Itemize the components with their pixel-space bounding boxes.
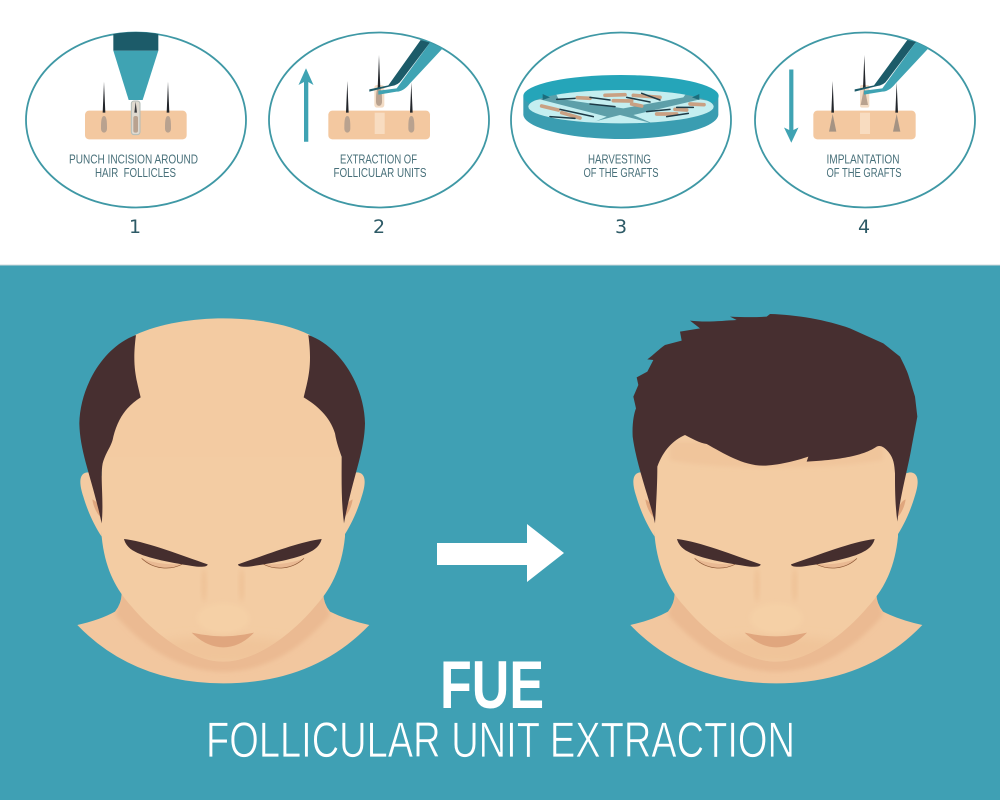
neck and shoulders [77, 590, 369, 683]
illustration: balding head before [77, 318, 369, 683]
illustration: tweezers extracting a follicle [328, 40, 443, 139]
panel: step 4 implantation [755, 32, 975, 238]
remaining side hair [79, 335, 365, 523]
eyebrows [677, 539, 875, 567]
eyelids [695, 558, 857, 568]
caption: step 3: OF THE GRAFTS [584, 166, 658, 180]
caption: step 4: OF THE GRAFTS [826, 166, 902, 180]
illustration: petri dish with grafts [520, 75, 723, 139]
mouth [192, 633, 254, 647]
panel: step 1 punch incision [26, 32, 246, 238]
caption: step 1: HAIR FOLLICLES [95, 166, 176, 180]
bald scalp [102, 318, 345, 470]
eyebrows [124, 539, 322, 567]
arrow: before to after [437, 524, 564, 582]
step number 2: 2 [373, 216, 385, 238]
caption: step 1: PUNCH INCISION AROUND [69, 152, 198, 166]
caption: step 4: IMPLANTATION [826, 152, 900, 166]
neck and shoulders [630, 590, 922, 683]
caption: step 3: HARVESTING [588, 152, 651, 166]
full head of hair [633, 314, 917, 523]
step number 1: 1 [129, 216, 141, 238]
ears [80, 472, 365, 537]
caption: step 3 [584, 152, 658, 180]
mouth [745, 633, 807, 647]
illustration: punch tool and skin [85, 32, 187, 139]
illustration: head with restored hair after [630, 314, 922, 683]
icon: down arrow [784, 70, 798, 143]
icon: up arrow [298, 68, 314, 142]
illustration: tweezers implanting a follicle [813, 40, 928, 139]
subtitle: Follicular Unit Extraction: FOLLICULAR UNIT EXTRACTION [206, 712, 795, 768]
caption: step 2: FOLLICULAR UNITS [334, 166, 426, 180]
face and forehead [655, 430, 898, 663]
step number 3: 3 [615, 216, 627, 238]
eyelids [142, 558, 304, 568]
ears [633, 472, 918, 537]
panel: step 2 extraction [269, 32, 489, 238]
title: FUE: FUE [440, 647, 544, 723]
caption: step 4 [826, 152, 902, 180]
face [102, 457, 345, 663]
caption: step 1 [69, 152, 198, 180]
panel: teal background [0, 265, 1000, 800]
caption: step 2 [334, 152, 426, 180]
caption: step 2: EXTRACTION OF [340, 152, 417, 166]
step number 4: 4 [858, 216, 870, 238]
panel: step 3 harvesting [511, 32, 731, 238]
